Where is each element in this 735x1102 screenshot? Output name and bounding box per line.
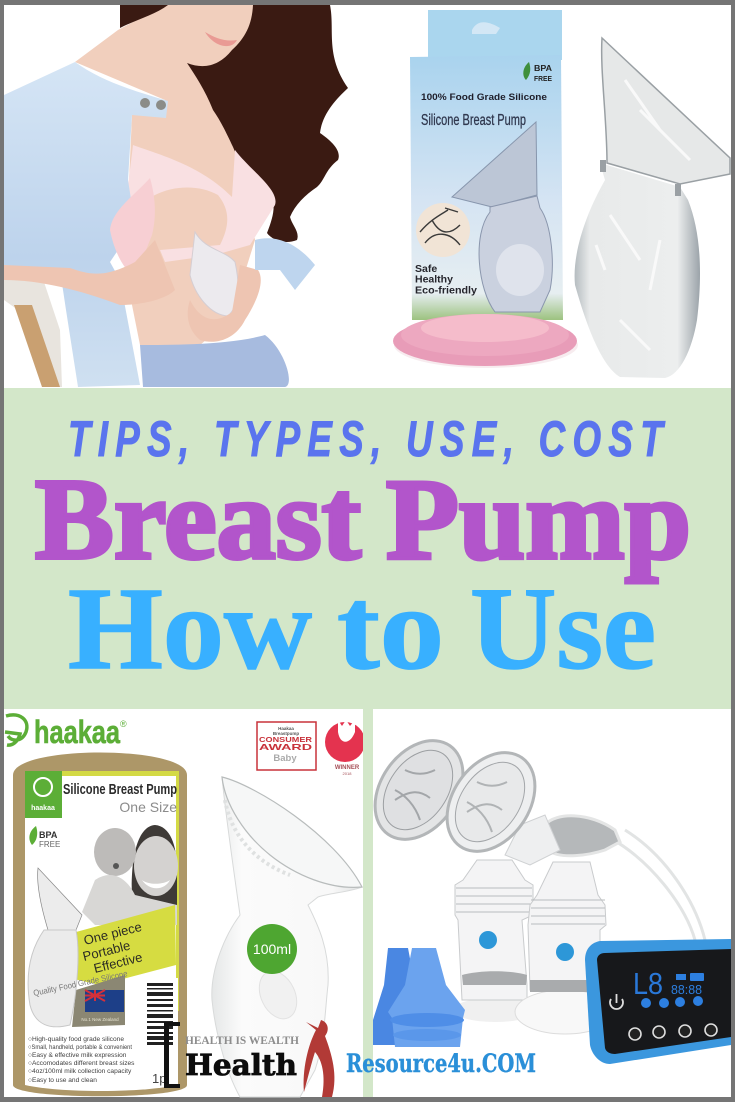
pump held [190,232,238,316]
yellow callout: Effective [92,949,144,976]
illustration circle [416,203,470,257]
open blouse [4,62,168,387]
chair [4,228,62,387]
NZ flag block: No.1 New Zealand [81,1017,119,1022]
forearm and hand [4,240,175,305]
bra [125,145,276,262]
tube heading: Silicone Breast Pump [63,782,177,798]
winner badge: WINNER [335,765,360,771]
capacity badge [247,924,297,974]
haakaa logo: haakaa [34,714,120,750]
consumer award badge: AWARD [259,742,312,752]
cardboard tube [13,752,187,1096]
panel: title band [4,388,731,710]
haakaa logo [5,714,127,750]
title line 2: to [337,563,444,694]
divider: green gap between bottom photos [363,709,373,1097]
title line 2: Use [470,563,656,694]
watermark tagline: HEALTH IS WEALTH [185,1035,299,1047]
winner badge: 2018 [343,771,352,776]
left bottle [453,860,537,1022]
box claims [415,263,477,296]
consumer award badge: Baby [273,753,297,764]
consumer award badge: Breastpump [273,731,299,736]
LCD digits [633,966,704,1008]
consumer award badge: CONSUMER [259,737,312,744]
product box [410,10,563,320]
winner badge [325,720,365,776]
title line 1: Pump [386,456,691,584]
panel: double electric pump photo [357,709,731,1097]
consumer award badge [257,722,316,770]
right bottle [515,862,615,1034]
haakaa logo: ® [120,719,127,729]
panel: mother using pump photo [4,5,380,388]
connector [505,815,560,865]
red figure [304,1020,334,1097]
right flange [429,736,553,868]
sleeve right [255,238,315,290]
watermark word Resource4u: Resource4u.COM [346,1049,536,1078]
control unit [585,939,731,1064]
feature list: ○High-quality food grade silicone [28,1036,124,1043]
feature list: ○Easy & effective milk expression [28,1052,127,1059]
breast pad [110,178,155,278]
consumer award badge: Haakaa [278,726,294,731]
left flange [357,724,481,856]
feature list: ○Small, handheld, portable & convenient [28,1044,132,1051]
BPA free mark: BPA [534,64,552,73]
BPA free mark: FREE [534,76,552,83]
title line 1: Breast [35,456,361,584]
yellow callout [65,905,176,985]
capacity badge: 100ml [253,941,291,957]
LCD digits: L8 [633,966,663,1001]
quality caption: Quality Food Grade Silicone [32,968,129,998]
skin: neck, chest and belly [75,5,262,345]
bracket [164,1022,180,1088]
NZ flag block [72,975,125,1027]
large clear pump [212,777,362,1097]
yellow callout: Portable [81,938,132,964]
skirt [140,335,289,387]
watermark: Health Resource4u.COM [164,1020,536,1097]
BPA free: FREE [39,840,60,849]
touch buttons [629,1024,717,1040]
feature list: ○4oz/100ml milk collection capacity [28,1068,132,1075]
box claims: Eco-friendly [415,284,477,296]
pink base ring [393,314,578,368]
box product name: Silicone Breast Pump [421,112,526,129]
box claims: Safe [415,263,437,275]
small pump on box [452,122,552,312]
feature list: ○Easy to use and clean [28,1077,97,1084]
green logo square [25,771,62,818]
tube size: One Size [119,799,177,815]
BPA free [29,826,60,849]
BPA free: BPA [39,830,58,840]
BPA free mark [523,62,552,83]
green logo square: haakaa [31,805,55,812]
panel: silicone pump product photo [380,5,731,388]
LCD digits: 88:88 [671,982,702,997]
title line 2 [68,563,656,694]
pack count: 1p [152,1071,166,1086]
panel: haakaa product photo [4,709,365,1097]
power icon [610,994,623,1009]
pump motor head [545,816,620,856]
barcode [138,978,178,1053]
title line 1 [35,456,691,584]
mother and baby photo [82,825,178,925]
small pump on tube [28,868,82,1027]
tubing [610,830,705,940]
hair [120,5,348,242]
watermark word Health: Health [185,1048,297,1082]
box heading: 100% Food Grade Silicone [421,92,547,103]
blue valve caps [373,948,465,1047]
blouse snap buttons [140,98,166,110]
title line 2: How [68,563,312,694]
feature list: ○Accomodates different breast sizes [28,1060,135,1067]
large silicone pump [575,38,730,378]
feature list [28,1036,135,1084]
right hand [188,265,261,342]
box claims: Healthy [415,274,453,286]
face lips [205,32,237,46]
yellow callout: One piece [82,919,143,948]
